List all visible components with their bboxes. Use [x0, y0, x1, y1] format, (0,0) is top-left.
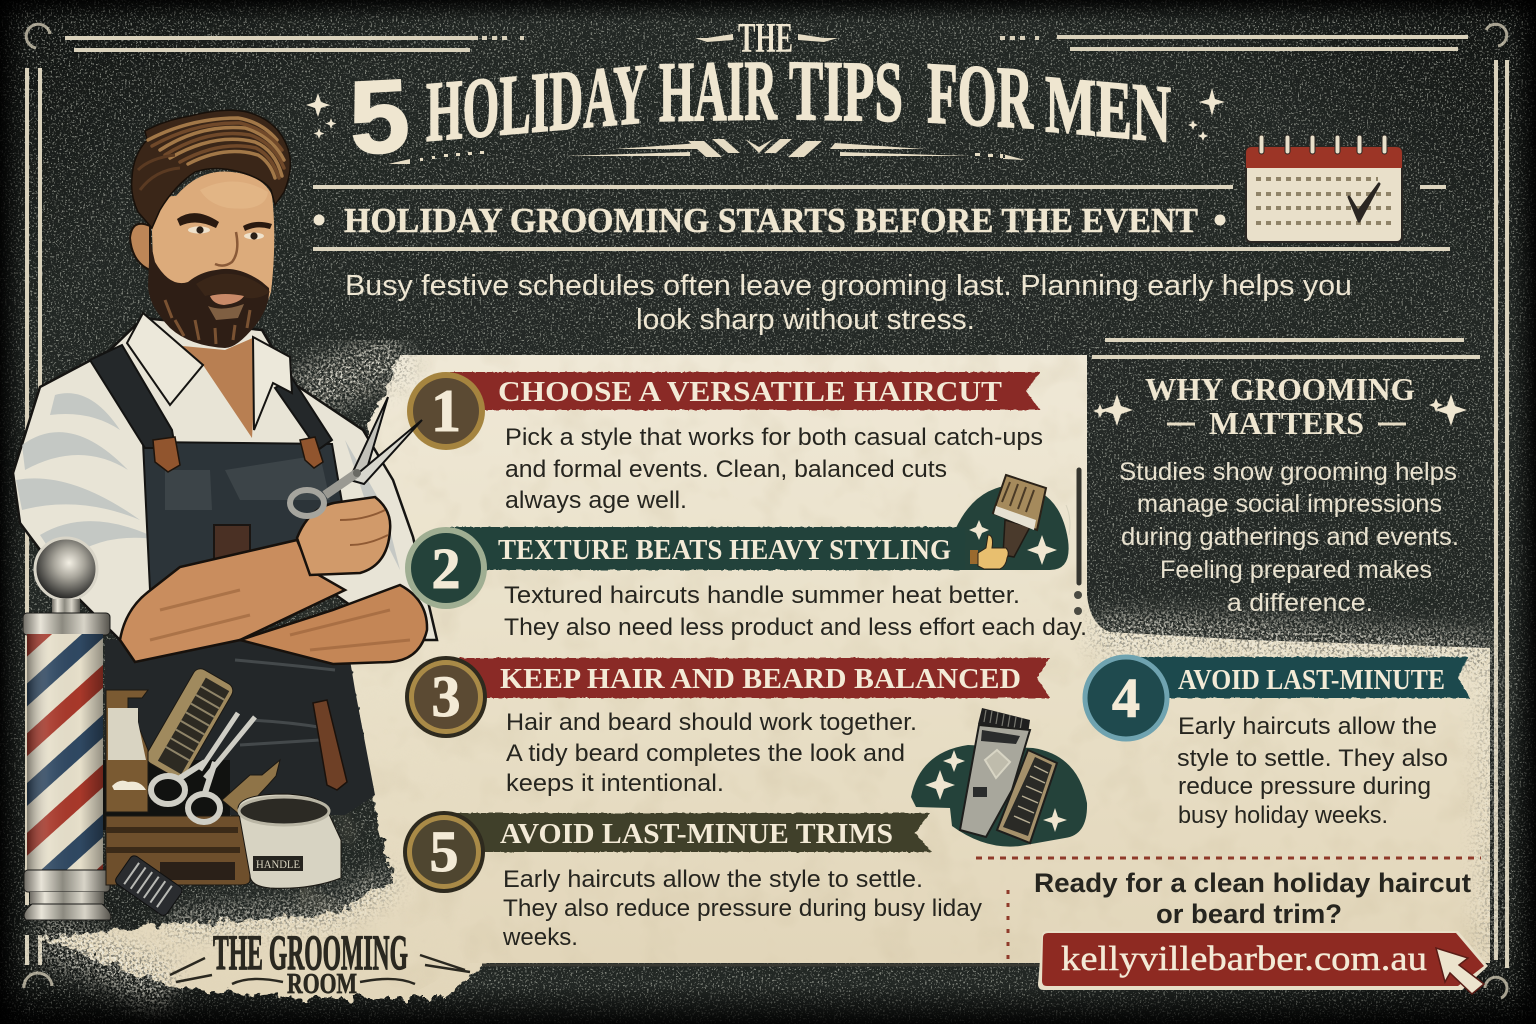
- barber figure: [13, 110, 437, 830]
- subheading bar: [313, 187, 1450, 249]
- badge 1: 1: [431, 378, 461, 444]
- comb: [144, 666, 236, 781]
- button: website: [1038, 931, 1488, 990]
- badge 3: [405, 656, 487, 738]
- ribbon 5: [450, 813, 932, 852]
- badge 5: [403, 811, 485, 893]
- apron straps: [90, 345, 332, 450]
- text: tip 4 body: [1177, 713, 1448, 829]
- icon: calendar with check: [1246, 135, 1402, 242]
- title: 5 Holiday Hair Tips For Men: 5: [346, 58, 412, 177]
- icon: cursor arrow: [1436, 948, 1484, 994]
- panel: why grooming matters: MATTERS: [1209, 405, 1364, 441]
- ribbon 1: CHOOSE A VERSATILE HAIRCUT: [498, 377, 1002, 408]
- icon: clippers and comb: [911, 708, 1087, 847]
- grooming products: [106, 666, 341, 917]
- intro text: [345, 270, 1352, 336]
- small scissors: [151, 713, 255, 822]
- text: tip 5 body: [502, 866, 982, 951]
- icon: brush on dome behind ribbon 2: [955, 475, 1070, 570]
- text: tip 3 body: [506, 709, 917, 797]
- intro text: Busy festive schedules often leave grooming last. Planning early helps you: [345, 270, 1352, 302]
- black comb: [114, 854, 184, 917]
- call to action: [976, 858, 1488, 994]
- fist: [297, 497, 390, 575]
- forearm two: [240, 585, 427, 664]
- ribbon 3: [450, 658, 1050, 698]
- badge 4: [1083, 655, 1169, 741]
- title: 5 Holiday Hair Tips For Men: FOR: [927, 45, 1034, 148]
- heading: THE: THE: [738, 16, 793, 62]
- panel: why grooming matters: Studies show grooming helps: [1119, 458, 1457, 486]
- ribbon 4: AVOID LAST-MINUTE: [1178, 665, 1445, 696]
- pomade jar: [238, 794, 341, 888]
- text: tip 3 body: Hair and beard should work together.: [506, 709, 917, 736]
- wooden brush: [106, 816, 250, 885]
- tip 5: [450, 813, 982, 951]
- logo: The Grooming Room: [170, 924, 470, 1000]
- title: 5 Holiday Hair Tips For Men: MEN: [1045, 58, 1171, 160]
- title: 5 Holiday Hair Tips For Men: TIPS: [789, 42, 903, 140]
- ornament under title: [388, 139, 1025, 164]
- text: tip 1 body: [505, 424, 1043, 514]
- panel: why grooming matters: during gatherings and events.: [1121, 523, 1459, 551]
- ear: [130, 224, 150, 270]
- panel: cream paper tips area: [0, 340, 1536, 1020]
- text: tip 3 body: A tidy beard completes the look and: [506, 740, 905, 767]
- beard tool handle: [222, 760, 280, 815]
- title: 5 Holiday Hair Tips For Men: [346, 42, 1171, 177]
- intro text: look sharp without stress.: [636, 304, 975, 336]
- logo: The Grooming Room: ROOM: [287, 968, 357, 1000]
- text: tip 5 body: weeks.: [502, 924, 578, 951]
- ribbon 2: [450, 527, 965, 570]
- badge 2: [405, 527, 487, 609]
- badge 4: 4: [1112, 668, 1140, 730]
- text: tip 4 body: Early haircuts allow the: [1178, 713, 1437, 740]
- call to action: or beard trim?: [1156, 899, 1342, 929]
- pump bottle: [106, 690, 148, 812]
- ribbon 3: KEEP HAIR AND BEARD BALANCED: [500, 664, 1021, 695]
- panel: why grooming matters: manage social impressions: [1137, 490, 1442, 518]
- heading: THE: [695, 16, 838, 62]
- panel: why grooming matters: Feeling prepared makes: [1160, 556, 1432, 584]
- icon: sparkles beside title: [306, 88, 1225, 141]
- hair: [132, 110, 290, 228]
- apron lower: [100, 630, 375, 830]
- tip 2: [450, 527, 1087, 641]
- text: tip 1 body: always age well.: [505, 487, 687, 514]
- panel: why grooming matters: a difference.: [1227, 589, 1373, 617]
- badge 3: 3: [432, 664, 460, 729]
- barber pole: [23, 538, 111, 920]
- neck and chest: [143, 315, 255, 438]
- collar: [127, 313, 292, 430]
- subheading bar: HOLIDAY GROOMING STARTS BEFORE THE EVENT: [344, 201, 1198, 240]
- pomade jar: HANDLE: [256, 857, 300, 871]
- tip 4: [1083, 655, 1470, 829]
- ribbon 4: [1130, 657, 1470, 698]
- button: website: kellyvillebarber.com.au: [1061, 939, 1427, 978]
- badge 2: 2: [432, 536, 460, 601]
- call to action: Ready for a clean holiday haircut: [1034, 868, 1471, 898]
- shirt shading: [16, 393, 400, 570]
- shirt torso and sleeves: [13, 318, 437, 640]
- panel: why grooming matters: [1092, 340, 1480, 617]
- ribbon 5: AVOID LAST-MINUE TRIMS: [500, 819, 893, 850]
- brows and eyes: [177, 213, 272, 231]
- panel: why grooming matters: WHY GROOMING: [1145, 371, 1415, 407]
- text: tip 4 body: reduce pressure during: [1178, 773, 1431, 800]
- text: tip 4 body: style to settle. They also: [1177, 745, 1448, 772]
- text: tip 1 body: Pick a style that works for both casual catch-ups: [505, 424, 1043, 451]
- title: 5 Holiday Hair Tips For Men: HAIR: [659, 42, 777, 140]
- forearm one: [120, 540, 345, 662]
- text: tip 4 body: busy holiday weeks.: [1178, 802, 1388, 829]
- beard and moustache: [148, 240, 269, 348]
- badge 1: [407, 372, 485, 450]
- text: tip 3 body: keeps it intentional.: [506, 770, 724, 797]
- text: tip 5 body: They also reduce pressure during busy liday: [503, 895, 982, 922]
- text: tip 2 body: They also need less product and less effort each day.: [504, 614, 1087, 641]
- ribbon 2: TEXTURE BEATS HEAVY STYLING: [498, 535, 951, 566]
- title: 5 Holiday Hair Tips For Men: HOLIDAY: [426, 45, 647, 160]
- text: tip 1 body: and formal events. Clean, balanced cuts: [505, 456, 947, 483]
- icon: big scissors: [290, 397, 422, 516]
- text: tip 2 body: [504, 582, 1087, 641]
- face: [152, 172, 274, 340]
- text: tip 2 body: Textured haircuts handle summer heat better.: [504, 582, 1020, 609]
- badge 5: 5: [430, 819, 458, 884]
- text: tip 5 body: Early haircuts allow the style to settle.: [503, 866, 923, 893]
- apron bib: [143, 442, 345, 590]
- ribbon 1: [450, 372, 1040, 410]
- tip 1: [450, 372, 1043, 514]
- logo: The Grooming Room: THE GROOMING: [213, 924, 408, 980]
- tip 3: [450, 658, 1050, 797]
